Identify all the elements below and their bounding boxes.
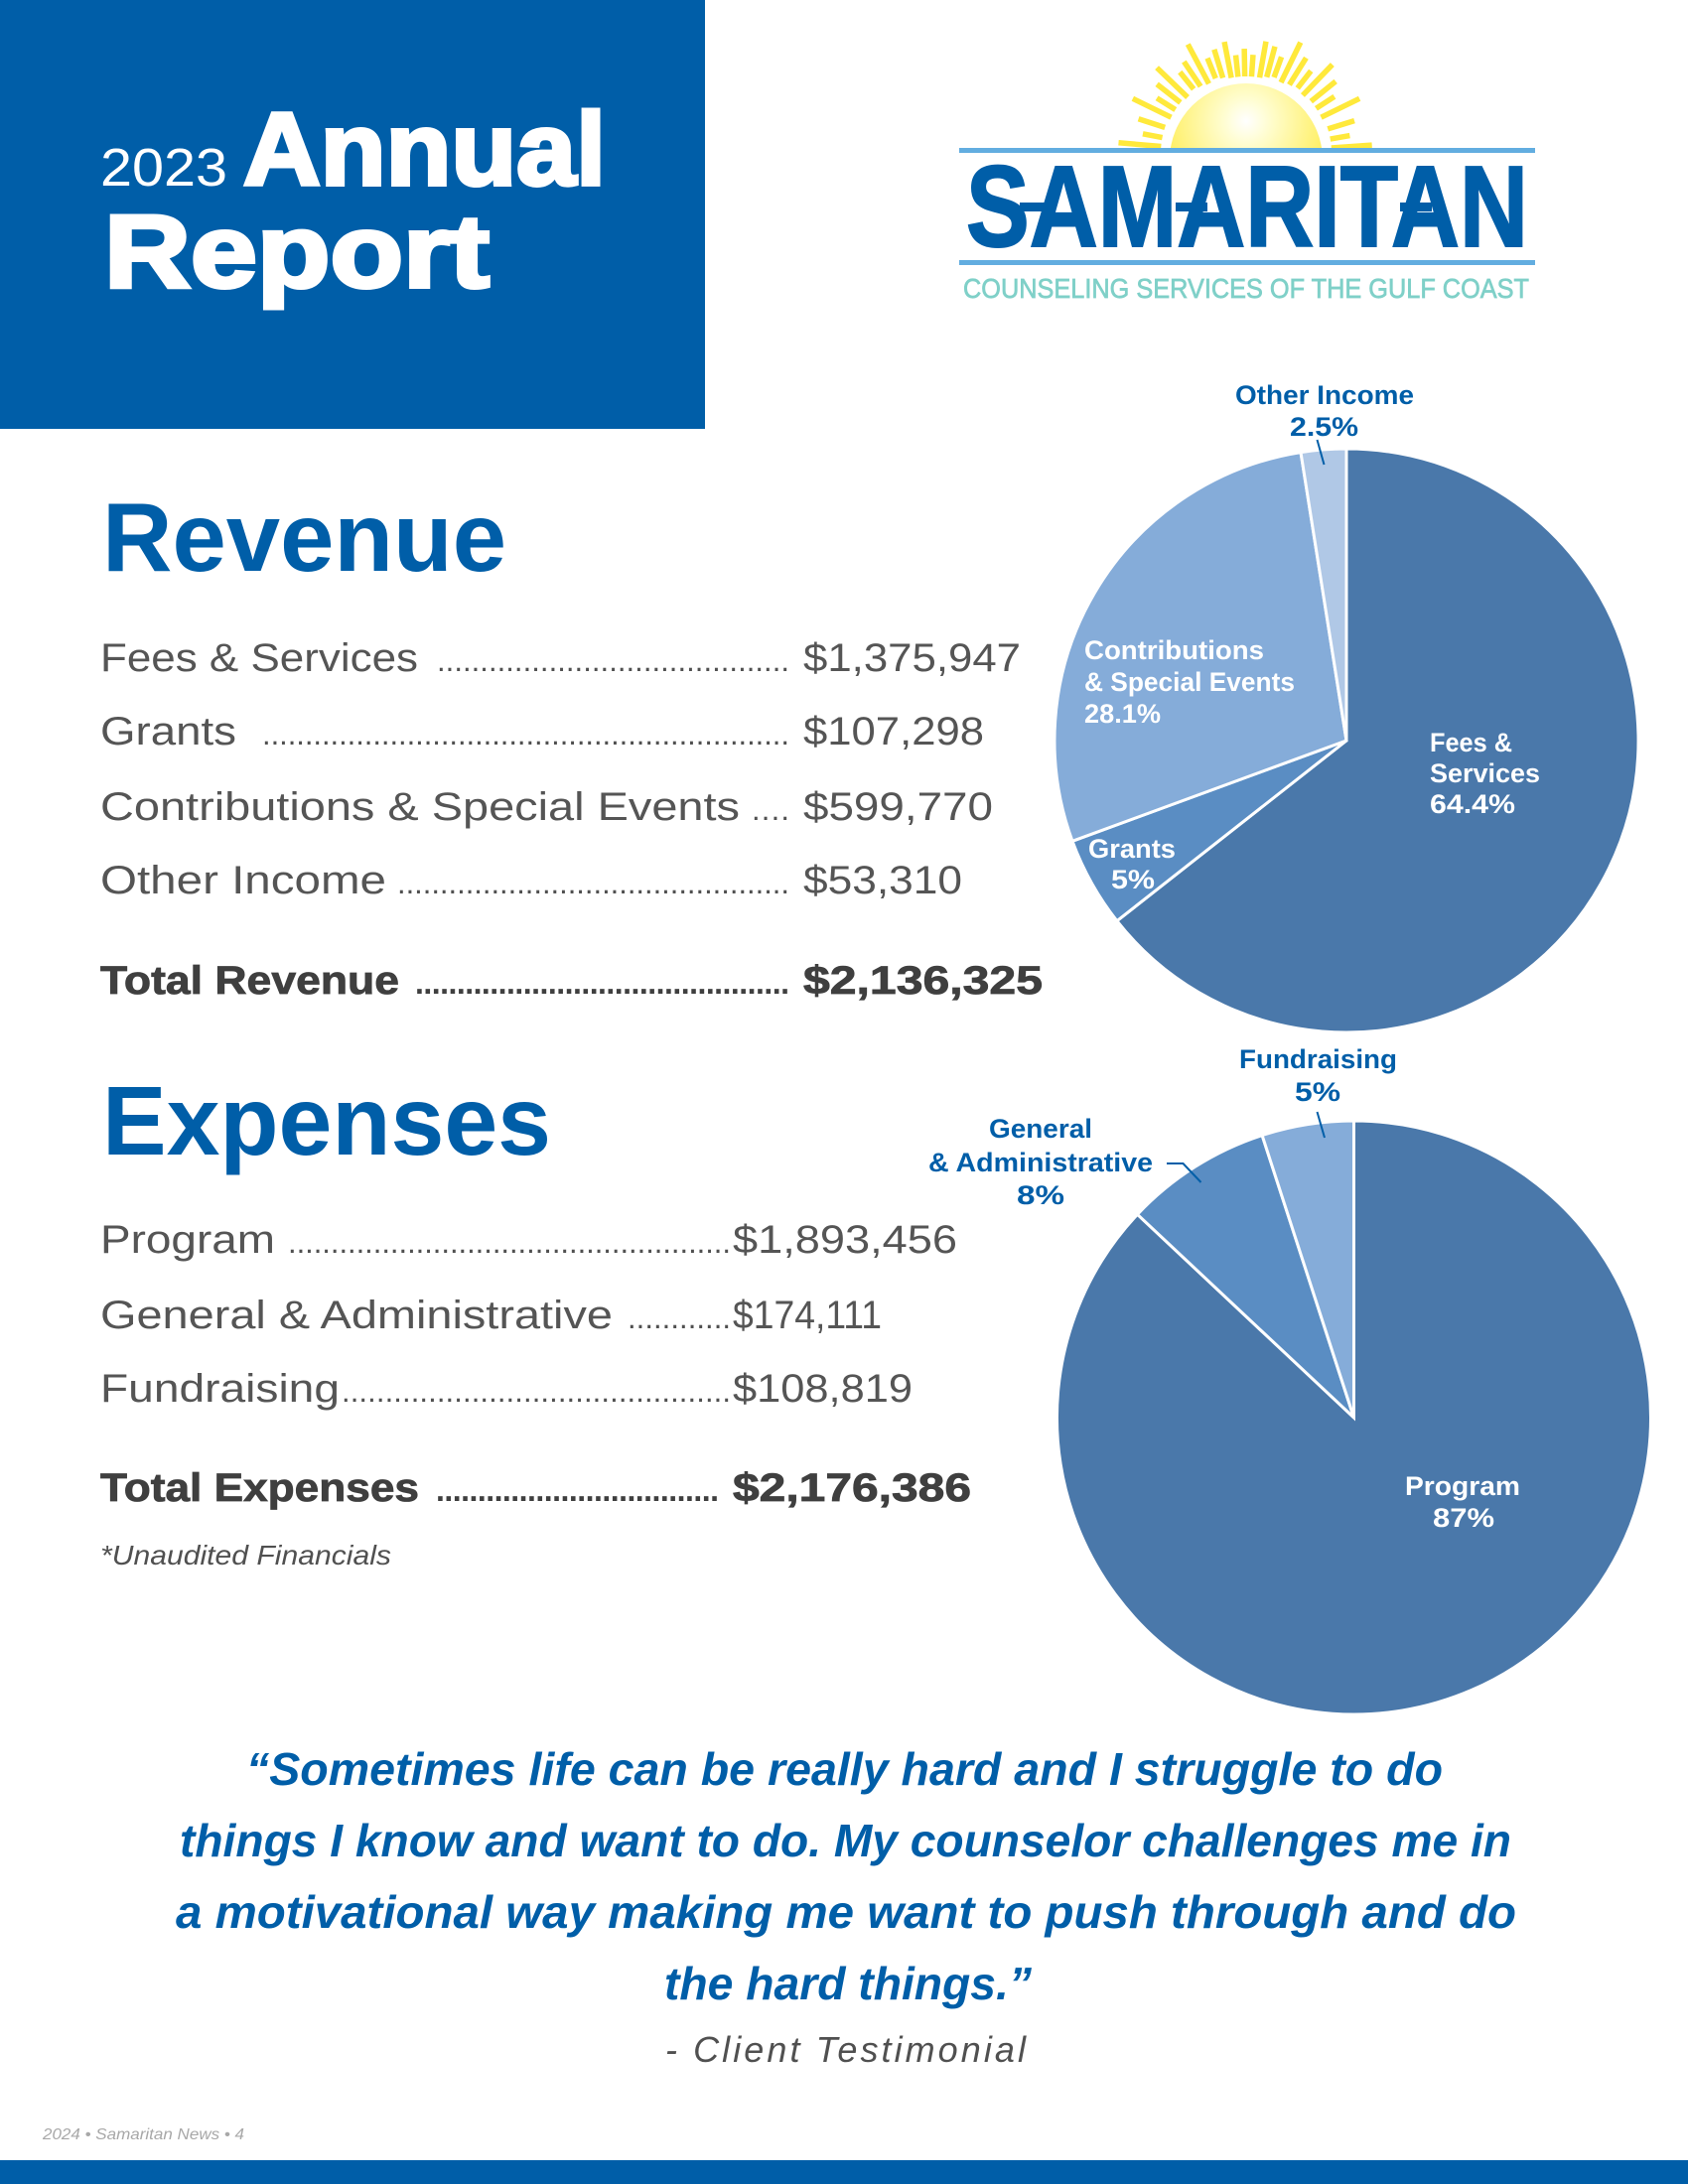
testimonial quote — [176, 1743, 1516, 2009]
row: Total Expenses: .................................. — [436, 1472, 719, 1508]
label: Fees & Services: Fees & — [1430, 728, 1512, 757]
row: Grants: $107,298 — [803, 710, 984, 753]
icon: sun — [1118, 41, 1372, 148]
label: Contributions & Special Events — [1084, 635, 1295, 729]
label: Program — [1405, 1471, 1520, 1533]
title: 2023 — [100, 138, 227, 198]
label: Other Income: Other Income — [1235, 380, 1414, 410]
row: Program — [100, 1218, 957, 1262]
row: Grants — [100, 710, 984, 753]
label: Fundraising: 5% — [1295, 1077, 1340, 1107]
slice: Other Income — [1301, 449, 1346, 741]
slice: Program — [1056, 1121, 1650, 1714]
logo: Samaritan: SAMARITAN — [966, 142, 1528, 271]
row: Total Expenses — [100, 1466, 971, 1510]
slice: Grants — [1072, 741, 1346, 921]
label: Fees & Services: Services — [1430, 758, 1540, 788]
row: Program: Program — [100, 1218, 275, 1262]
row: Program: .................................................... — [288, 1225, 731, 1260]
label: Contributions & Special Events: & Special Events — [1084, 667, 1295, 697]
title — [100, 92, 606, 310]
row: Other Income — [100, 859, 962, 902]
row: Total Revenue: $2,136,325 — [803, 959, 1043, 1003]
row: Fundraising: ............................................. — [342, 1374, 731, 1409]
row: Contributions & Special Events: Contributions & Special Events — [100, 785, 740, 829]
row: General & Administrative: $174,111 — [733, 1294, 882, 1337]
label: Program: 87% — [1433, 1503, 1494, 1533]
row: Other Income: Other Income — [100, 859, 386, 902]
pie chart: revenue — [1055, 380, 1638, 1032]
row: Fundraising: Fundraising — [100, 1367, 340, 1411]
slice: General & Administrative — [1138, 1136, 1354, 1418]
row: Total Revenue: Total Revenue — [100, 959, 399, 1003]
heading: Revenue: Revenue — [102, 482, 506, 592]
logo: Samaritan — [959, 42, 1535, 304]
label: Other Income: 2.5% — [1290, 412, 1358, 442]
slice: Contributions & Special Events — [1055, 453, 1346, 841]
expenses table — [100, 1218, 971, 1510]
header panel — [0, 0, 705, 429]
label: Program: Program — [1405, 1471, 1520, 1501]
row: General & Administrative: General & Administrative — [100, 1294, 613, 1337]
label: Contributions & Special Events: 28.1% — [1084, 699, 1161, 729]
leader line: General & Administrative — [1167, 1163, 1201, 1182]
testimonial quote: things I know and want to do. My counselor challenges me in — [180, 1815, 1511, 1866]
row: Contributions & Special Events — [100, 785, 993, 829]
testimonial quote: the hard things.” — [664, 1958, 1032, 2009]
row: General & Administrative: ............ — [628, 1300, 731, 1335]
label: Fees & Services — [1430, 728, 1540, 819]
row: Total Expenses: Total Expenses — [100, 1466, 419, 1510]
row: Fees & Services: Fees & Services — [100, 636, 418, 680]
row: Total Revenue: ............................................. — [415, 965, 789, 1001]
row: Total Revenue — [100, 959, 1043, 1003]
testimonial quote: a motivational way making me want to push through and do — [176, 1886, 1516, 1938]
row: Other Income: $53,310 — [803, 859, 962, 902]
row: Contributions & Special Events: .... — [752, 792, 789, 827]
revenue table — [100, 636, 1043, 1003]
label: Fees & Services: 64.4% — [1430, 789, 1515, 819]
label: General & Administrative — [928, 1114, 1153, 1210]
row: Fees & Services: ......................................... — [437, 643, 789, 678]
logo: Samaritan: COUNSELING SERVICES OF THE GULF COAST — [963, 273, 1529, 304]
footer page note: 2024 • Samaritan News • 4 — [42, 2126, 244, 2143]
row: General & Administrative — [100, 1294, 882, 1337]
row: Grants: Grants — [100, 710, 236, 753]
quote attribution: - Client Testimonial — [665, 2029, 1027, 2070]
row: Other Income: .............................................. — [397, 866, 789, 900]
label: Grants — [1088, 834, 1176, 894]
row: Grants: .............................................................. — [262, 717, 789, 751]
label: General & Administrative: General — [989, 1114, 1092, 1144]
row: Program: $1,893,456 — [733, 1218, 957, 1262]
label: General & Administrative: & Administrative — [928, 1148, 1153, 1177]
title: Annual — [243, 92, 606, 207]
row: Fees & Services — [100, 636, 1021, 680]
label: Fundraising — [1239, 1044, 1397, 1107]
label: Grants: 5% — [1111, 865, 1155, 894]
row: Fundraising — [100, 1367, 913, 1411]
pie chart: expenses — [928, 1044, 1650, 1714]
footer bar — [0, 2160, 1688, 2184]
row: Total Expenses: $2,176,386 — [733, 1466, 971, 1510]
slice: Fees & Services — [1117, 449, 1638, 1032]
note: unaudited financials: *Unaudited Financials — [100, 1540, 391, 1570]
label: Other Income — [1235, 380, 1414, 442]
title: Report — [104, 195, 490, 310]
row: Contributions & Special Events: $599,770 — [803, 785, 993, 829]
row: Fundraising: $108,819 — [733, 1367, 913, 1411]
label: General & Administrative: 8% — [1017, 1180, 1064, 1210]
label: Grants: Grants — [1088, 834, 1176, 864]
label: Fundraising: Fundraising — [1239, 1044, 1397, 1074]
leader line: Fundraising — [1317, 1112, 1325, 1138]
row: Fees & Services: $1,375,947 — [803, 636, 1021, 680]
testimonial quote: “Sometimes life can be really hard and I struggle to do — [246, 1743, 1443, 1795]
slice: Fundraising — [1262, 1121, 1354, 1418]
leader line: Other Income — [1317, 440, 1325, 465]
heading: Expenses: Expenses — [102, 1066, 551, 1175]
label: Contributions & Special Events: Contributions — [1084, 635, 1264, 665]
